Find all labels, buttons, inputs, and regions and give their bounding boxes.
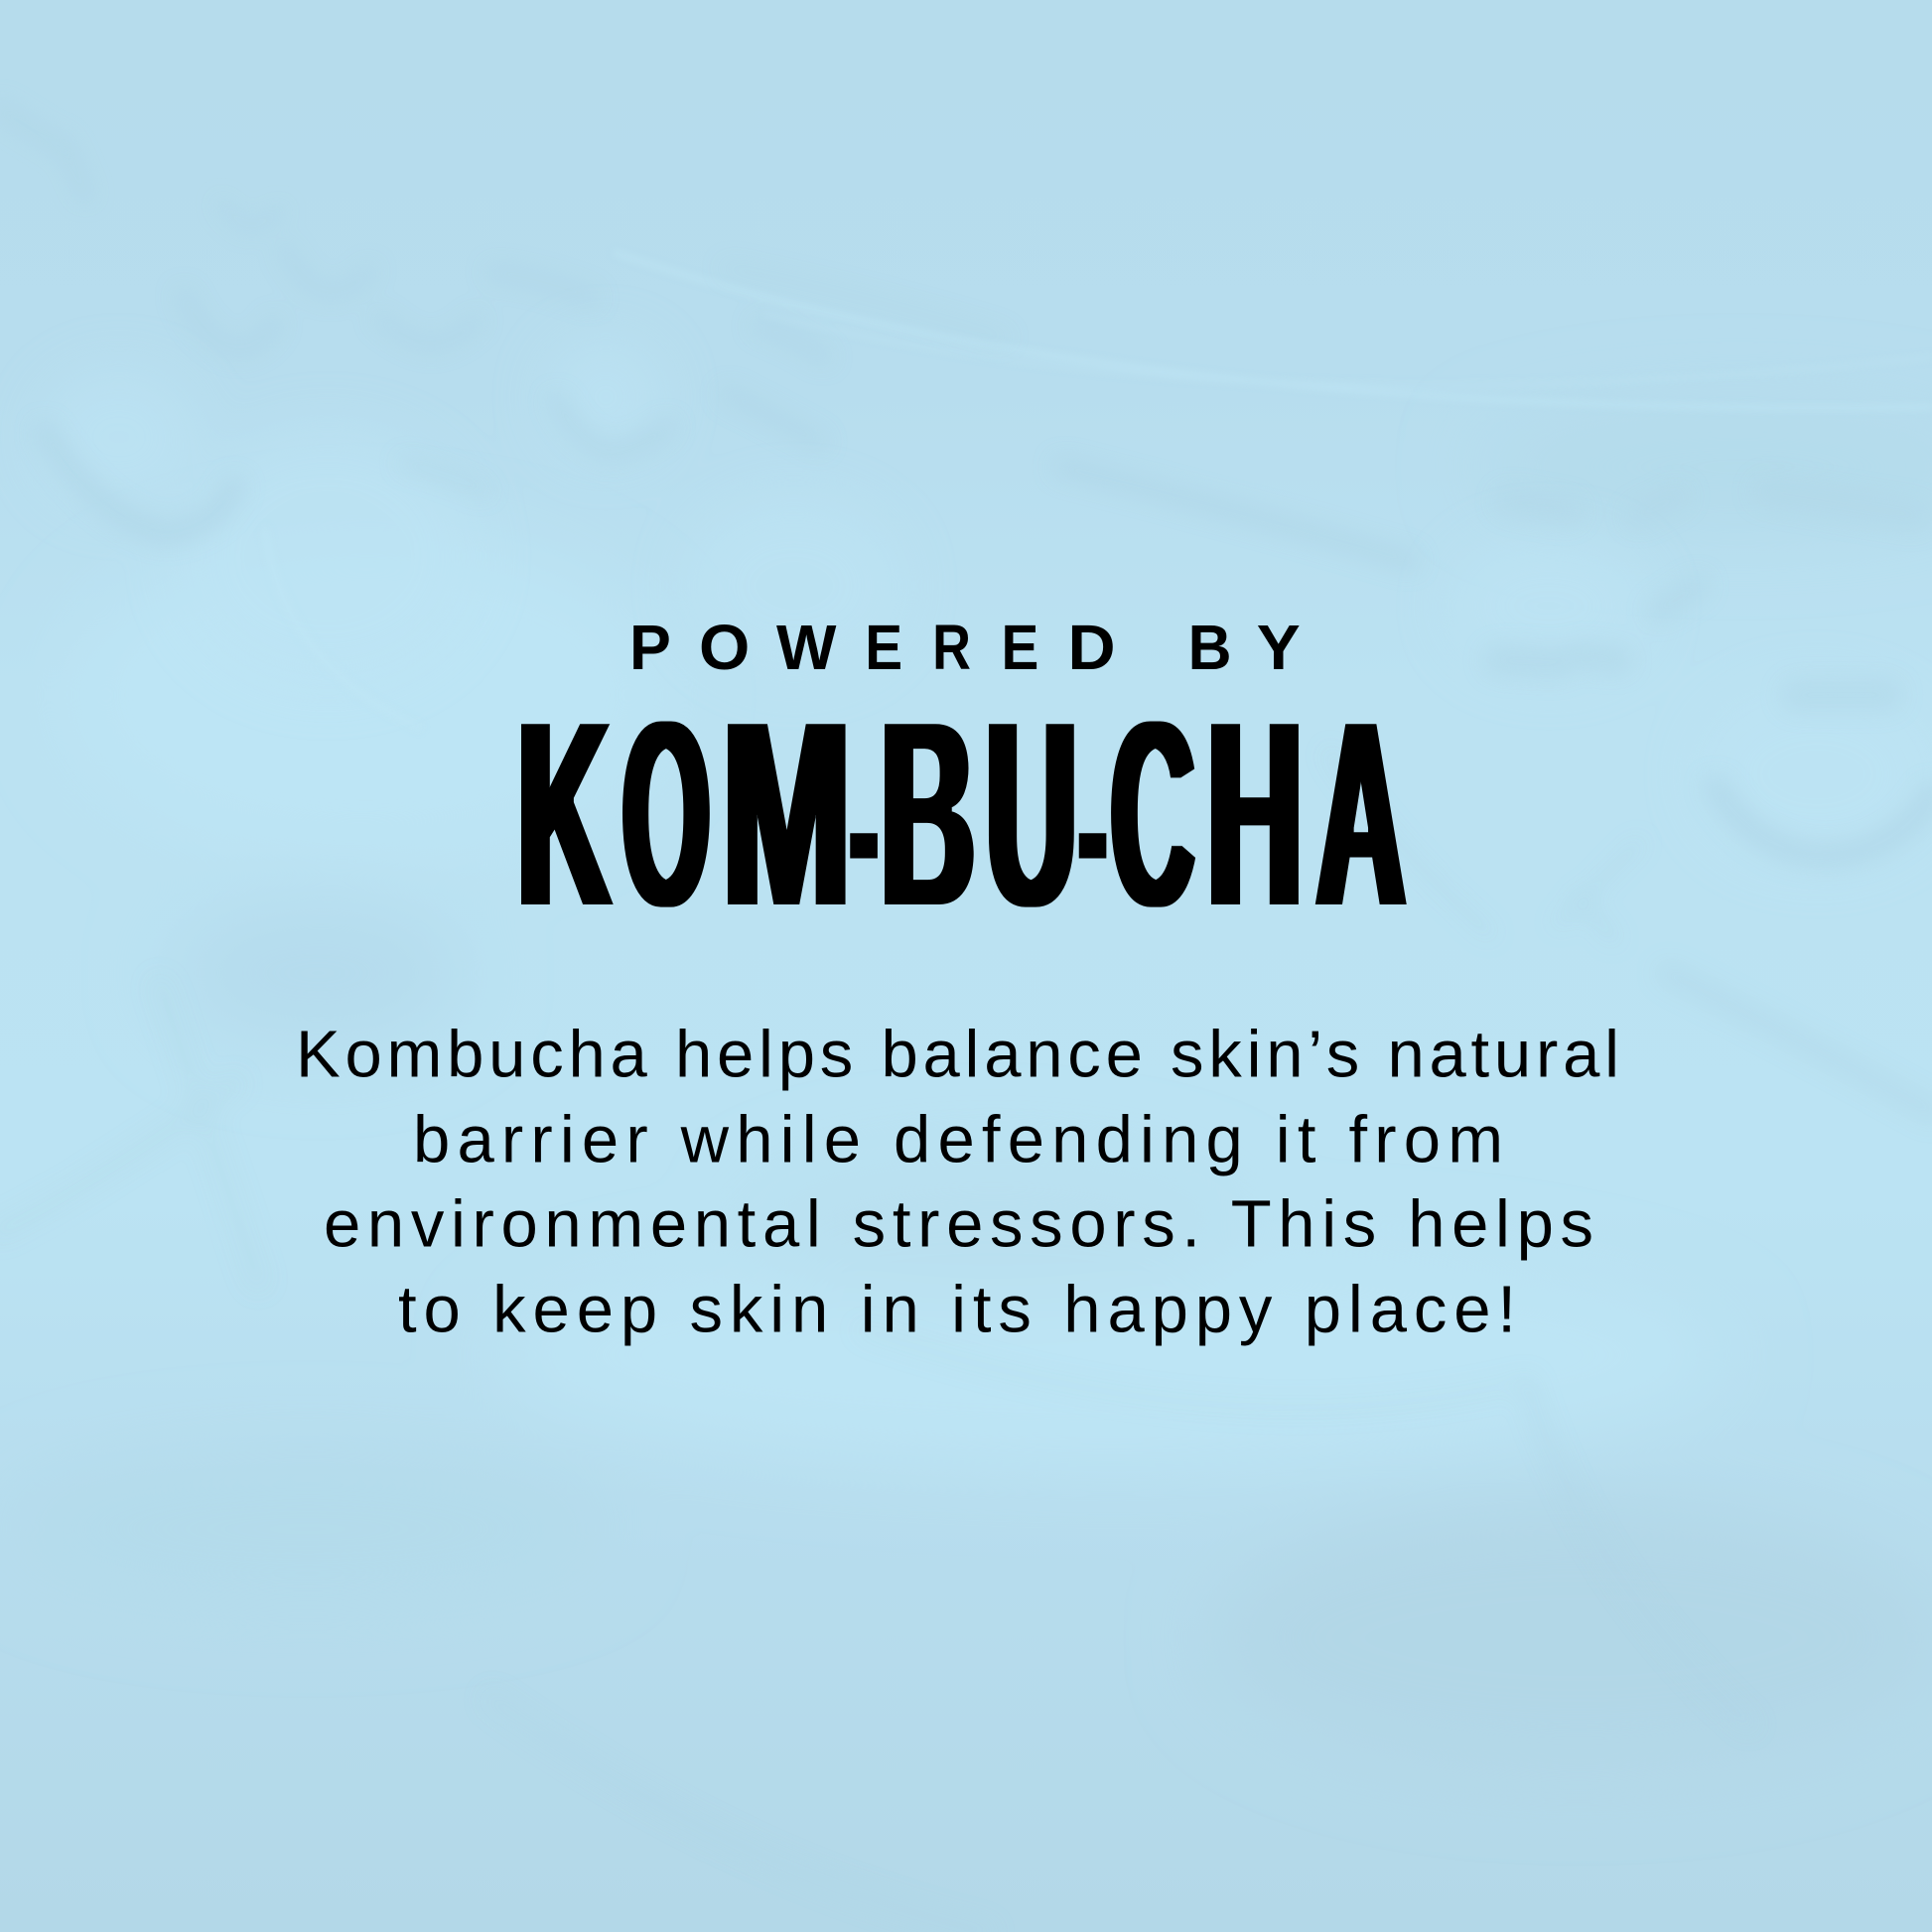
heading: POWERED BY: E <box>1001 612 1038 683</box>
heading: POWERED BY <box>629 612 1301 683</box>
heading: POWERED BY: W <box>776 612 837 683</box>
logo wordmark: KOM-BU-CHA: - <box>846 709 882 945</box>
heading: POWERED BY: D <box>1068 612 1116 683</box>
heading: POWERED BY: Y <box>1257 612 1301 683</box>
logo wordmark: KOM-BU-CHA: - <box>1074 709 1111 945</box>
body text: to keep skin in its happy place! <box>398 1273 1516 1346</box>
logo wordmark: KOM-BU-CHA: M <box>723 664 851 964</box>
body text: environmental stressors. This helps <box>324 1187 1593 1261</box>
heading: POWERED BY: P <box>629 613 671 683</box>
body text: barrier while defending it from <box>413 1102 1503 1177</box>
logo wordmark: KOM-BU-CHA: H <box>1207 664 1303 964</box>
logo wordmark: KOM-BU-CHA: B <box>881 664 975 963</box>
body text: Kombucha helps balance skin’s natural <box>296 1017 1619 1092</box>
heading: POWERED BY: R <box>932 612 971 683</box>
logo wordmark: KOM-BU-CHA: U <box>986 663 1076 964</box>
heading: POWERED BY: O <box>699 612 750 683</box>
logo wordmark: KOM-BU-CHA: C <box>1111 665 1194 964</box>
logo wordmark: KOM-BU-CHA <box>517 663 1406 964</box>
heading: POWERED BY: E <box>865 612 902 683</box>
logo wordmark: KOM-BU-CHA: A <box>1316 664 1406 964</box>
heading: POWERED BY: B <box>1188 613 1232 683</box>
body text <box>296 1017 1619 1346</box>
logo wordmark: KOM-BU-CHA: O <box>622 664 710 963</box>
logo wordmark: KOM-BU-CHA: K <box>517 663 611 963</box>
